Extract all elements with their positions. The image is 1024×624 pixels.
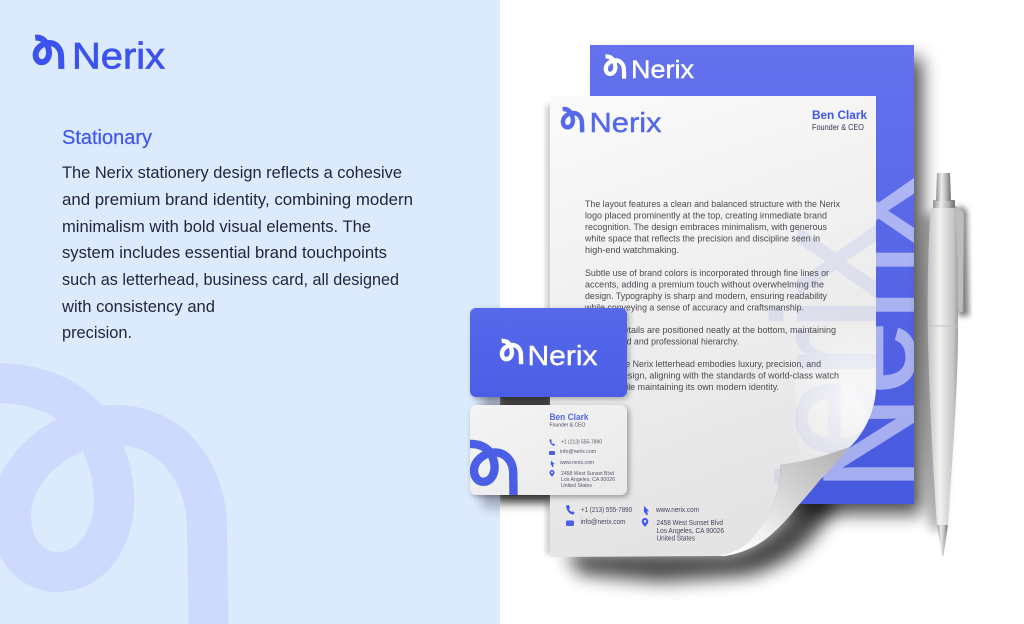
heading: Stationary: Stationary xyxy=(62,127,152,149)
text block: description: such as letterhead, business card, all designed xyxy=(62,271,399,289)
text block: description: and premium brand identity, combining modern xyxy=(62,191,413,209)
wordmark: Nerix xyxy=(72,36,166,76)
text block: letter body: high-end watchmaking. xyxy=(585,245,679,255)
watermark: logo symbol xyxy=(0,383,209,624)
logo symbol: card back xyxy=(466,444,514,499)
text block: letter body: white space that reflects the precision and discipline seen in xyxy=(584,234,820,244)
pen shadow xyxy=(919,215,950,530)
text block: description: precision. xyxy=(62,324,132,342)
icon: phone xyxy=(566,505,574,514)
business card: white back: Founder & CEO xyxy=(550,422,586,428)
contact details: sheet footer: +1 (213) 555-7890 xyxy=(581,507,632,514)
icon: location pin xyxy=(550,470,554,477)
text block: letter body: Overall, the Nerix letterhead embodies luxury, precision, and xyxy=(585,359,821,369)
icon: cursor xyxy=(551,460,554,467)
icon: mail xyxy=(566,520,574,526)
text block: letter body: brands while maintaining its own modern identity. xyxy=(585,382,779,392)
name: Ben Clark: Ben Clark xyxy=(812,110,868,122)
logo: sheet xyxy=(563,107,662,138)
text block: letter body: modern design, aligning with the standards of world-class watch xyxy=(585,370,839,380)
contact details: sheet footer: Los Angeles, CA 90026 xyxy=(656,528,724,535)
text block: letter body: The layout features a clean and balanced structure with the Nerix xyxy=(585,199,840,209)
name: Ben Clark xyxy=(812,110,868,132)
text block: letter body: Contact details are positioned neatly at the bottom, maintaining xyxy=(585,325,836,335)
contact details: card: Los Angeles, CA 90026 xyxy=(561,477,615,483)
name: Ben Clark: Founder & CEO xyxy=(812,123,864,132)
business card: white back xyxy=(466,405,629,499)
shadow: sheet left edge xyxy=(546,105,554,555)
icon: cursor xyxy=(644,506,649,515)
watermark: vertical wordmark: Nerix xyxy=(796,178,942,490)
name: card: Ben Clark xyxy=(550,412,589,422)
pen cap button xyxy=(936,173,951,201)
icon: logo symbol xyxy=(35,38,61,69)
logo: card: Nerix xyxy=(528,340,598,371)
watermark: sheet wordmark: Nerix xyxy=(744,225,906,563)
shadow: cards on background xyxy=(500,397,550,512)
text block: letter body xyxy=(584,199,840,392)
pen collar xyxy=(933,200,955,208)
text block: letter body: design. Typography is sharp and modern, ensuring readability xyxy=(585,291,827,301)
text block: letter body: recognition. The design embraces minimalism, with generous xyxy=(585,222,827,232)
contact details: card: United States xyxy=(561,483,593,489)
contact details: card: +1 (213) 555-7890 xyxy=(561,440,602,446)
white letterhead sheet xyxy=(550,96,906,563)
text block: description: system includes essential brand touchpoints xyxy=(62,244,387,262)
icon: location pin xyxy=(642,518,648,527)
shadow: cards on panel xyxy=(476,397,500,514)
contact details: sheet footer: 2458 West Sunset Blvd xyxy=(656,520,723,527)
pen seam xyxy=(928,326,958,327)
contact details: sheet footer: www.nerix.com xyxy=(655,507,699,514)
icon: phone xyxy=(550,439,555,446)
text block: letter body: while conveying a sense of accuracy and craftsmanship. xyxy=(584,302,804,312)
text block: description: The Nerix stationery design reflects a cohesive xyxy=(62,164,402,182)
text block: description xyxy=(61,164,413,342)
icon: mail xyxy=(549,451,555,455)
text block: letter body: accents, adding a premium touch without overwhelming the xyxy=(585,280,824,290)
shadow: back sheet xyxy=(604,58,922,514)
logo: back sheet xyxy=(606,56,695,84)
page curl xyxy=(715,447,850,556)
contact details: card xyxy=(549,439,615,489)
text block: description: minimalism with bold visual elements. The xyxy=(62,218,371,236)
logo: card xyxy=(502,340,598,371)
business card: blue front xyxy=(470,308,629,399)
contact details: card: info@nerix.com xyxy=(560,449,596,455)
pen tip xyxy=(937,524,948,556)
back sheet: blue letterhead xyxy=(590,45,942,504)
text block: letter body: logo placed prominently at the top, creating immediate brand xyxy=(585,210,827,220)
text block: description: with consistency and xyxy=(61,298,215,316)
pen body xyxy=(928,208,958,525)
text block: letter body: Subtle use of brand colors is incorporated through fine lines or xyxy=(585,268,829,278)
contact details: sheet footer: info@nerix.com xyxy=(580,519,626,526)
logo: sheet: Nerix xyxy=(590,107,662,138)
contact details: sheet footer xyxy=(566,505,724,542)
pen xyxy=(919,173,969,556)
shadow: white sheet bottom xyxy=(565,485,838,582)
pen clip xyxy=(955,206,964,313)
text block: letter body: a structured and professional hierarchy. xyxy=(585,336,739,346)
logo: back sheet: Nerix xyxy=(631,56,695,84)
contact details: sheet footer: United States xyxy=(656,536,695,542)
panel: left background xyxy=(0,0,500,624)
contact details: card: www.nerix.com xyxy=(560,460,594,466)
logo: Nerix header xyxy=(35,36,166,76)
contact details: card: 2458 West Sunset Blvd xyxy=(561,471,614,477)
